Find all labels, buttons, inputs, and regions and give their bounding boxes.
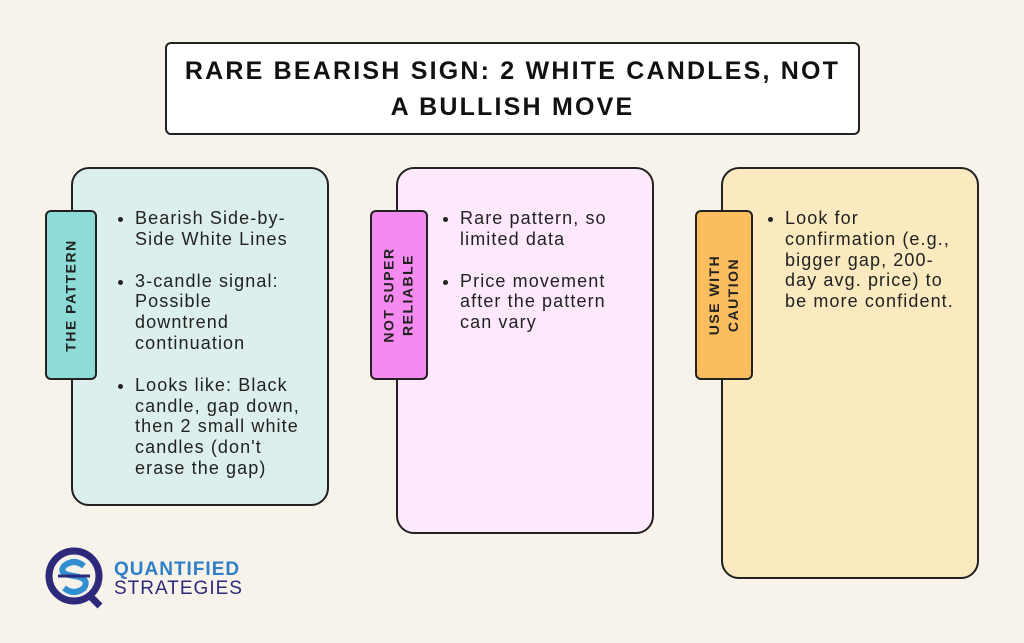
- text: pattern bullets: [118, 208, 300, 478]
- panel: use with caution: [721, 167, 979, 579]
- text: pattern bullets: candles (don't: [135, 437, 262, 457]
- text: pattern bullets: Looks like: Black: [135, 375, 288, 395]
- panel: not super reliable: [396, 167, 654, 534]
- text: pattern bullets: candle, gap down,: [135, 396, 300, 416]
- text: reliability bullets: after the pattern: [460, 291, 606, 311]
- text: logo name: QUANTIFIED: [114, 559, 240, 580]
- title: RARE BEARISH SIGN: 2 WHITE CANDLES, NOT: [185, 56, 840, 84]
- text: caution bullets: bigger gap, 200-: [785, 250, 934, 270]
- text: pattern bullets: Side White Lines: [135, 229, 288, 249]
- tab: use with caution: USE WITH: [706, 255, 722, 335]
- text: caution bullets: be more confident.: [785, 291, 954, 311]
- text: pattern bullets: downtrend: [135, 312, 229, 332]
- text: caution bullets: confirmation (e.g.,: [785, 229, 950, 249]
- text: caution bullets: day avg. price) to: [785, 270, 943, 290]
- title: A BULLISH MOVE: [391, 92, 634, 120]
- panel: the pattern: [71, 167, 329, 506]
- tab: not super reliable: RELIABLE: [400, 254, 416, 336]
- text: pattern bullets: 3-candle signal:: [135, 271, 279, 291]
- icon: logo mark: [46, 548, 102, 608]
- tab: the pattern: [45, 210, 97, 380]
- tab: use with caution: [695, 210, 753, 380]
- text: caution bullets: [768, 208, 954, 311]
- tab: the pattern: THE PATTERN: [63, 239, 79, 351]
- text: pattern bullets: Possible: [135, 291, 212, 311]
- text: pattern bullets: then 2 small white: [135, 416, 299, 436]
- text: reliability bullets: Rare pattern, so: [460, 208, 607, 228]
- title: [165, 42, 860, 135]
- text: reliability bullets: limited data: [460, 229, 565, 249]
- text: logo name: STRATEGIES: [114, 578, 243, 599]
- tab: not super reliable: [370, 210, 428, 380]
- text: reliability bullets: can vary: [460, 312, 537, 332]
- text: logo name: [114, 559, 243, 599]
- logo: [46, 548, 243, 608]
- text: reliability bullets: Price movement: [460, 271, 605, 291]
- text: pattern bullets: erase the gap): [135, 458, 266, 478]
- text: reliability bullets: [443, 208, 607, 332]
- tab: use with caution: CAUTION: [725, 258, 741, 332]
- tab: not super reliable: NOT SUPER: [381, 247, 397, 343]
- text: pattern bullets: Bearish Side-by-: [135, 208, 286, 228]
- text: caution bullets: Look for: [785, 208, 859, 228]
- text: pattern bullets: continuation: [135, 333, 245, 353]
